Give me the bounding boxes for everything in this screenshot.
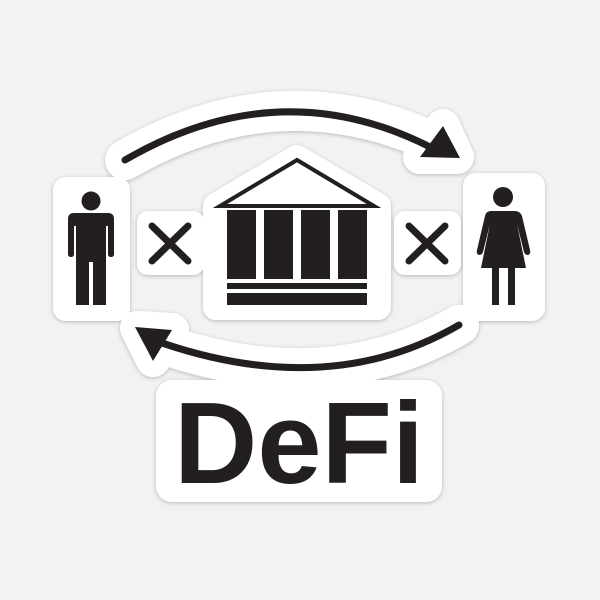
- top arrow: [125, 112, 460, 160]
- icon: bank: [220, 160, 374, 305]
- title: DeFi: DeFi: [174, 378, 424, 508]
- icon: man: [68, 192, 114, 305]
- icon: woman: [477, 187, 530, 305]
- icon: times left: [152, 226, 188, 261]
- bottom arrow: [135, 325, 459, 368]
- icon: times right: [409, 226, 445, 261]
- sticker backing: [66, 111, 532, 486]
